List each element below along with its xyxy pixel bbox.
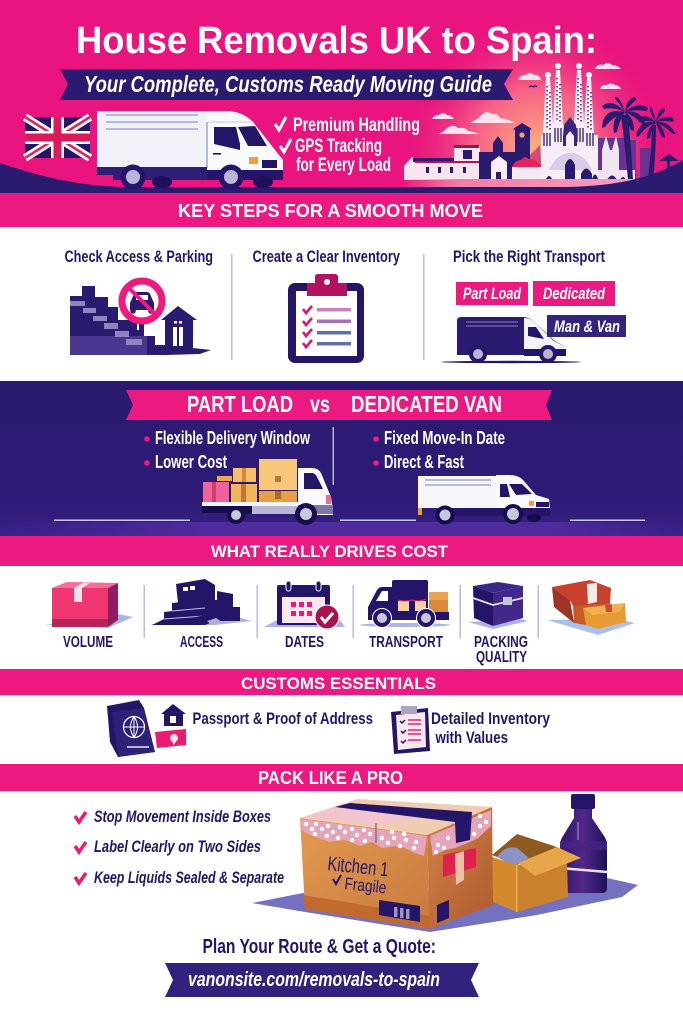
dedicated van benefits xyxy=(373,428,505,472)
clouds xyxy=(432,63,621,134)
header checks: GPS Tracking xyxy=(295,136,382,157)
panel: packing tips: Keep Liquids Sealed & Separate xyxy=(94,868,284,887)
heading: customs essentials xyxy=(0,669,683,695)
step heading: transport: Pick the Right Transport xyxy=(453,247,605,266)
panel: part load vs dedicated van xyxy=(0,381,683,536)
customs item: inventory text xyxy=(431,709,550,747)
heading: what really drives cost: WHAT REALLY DRIVES COST xyxy=(211,542,449,561)
Sagrada Familia xyxy=(541,63,598,179)
part load benefits: Lower Cost xyxy=(155,452,227,472)
illustration: packed boxes and bottle xyxy=(252,794,638,932)
comparison ribbon: DEDICATED VAN xyxy=(351,391,502,417)
url ribbon xyxy=(165,963,479,997)
step heading: inventory: Create a Clear Inventory xyxy=(252,247,400,266)
panel: customs essentials xyxy=(107,700,550,757)
heading: customs essentials: CUSTOMS ESSENTIALS xyxy=(241,674,436,693)
flatbed truck with boxes xyxy=(202,459,333,525)
driver: dates: DATES xyxy=(285,634,324,651)
url ribbon: vanonsite.com/removals-to-spain xyxy=(188,969,440,991)
driver: access xyxy=(150,579,252,651)
left white building xyxy=(404,145,480,180)
icon: detailed inventory clipboard xyxy=(391,706,430,754)
heading: what really drives cost xyxy=(0,536,683,566)
call to action xyxy=(165,936,479,997)
comparison ribbon xyxy=(126,390,552,420)
tag: part load: Part Load xyxy=(463,284,521,303)
small gothic annex xyxy=(598,136,635,180)
call to action: Plan Your Route & Get a Quote: xyxy=(202,936,436,958)
heading: pack like a pro: PACK LIKE A PRO xyxy=(258,768,403,788)
comparison ribbon: PART LOAD xyxy=(187,391,293,417)
panel: packing tips: Stop Movement Inside Boxes xyxy=(94,807,271,826)
customs item: passport text: Passport & Proof of Address xyxy=(192,709,373,728)
tag: dedicated xyxy=(533,281,615,306)
panel: key steps xyxy=(0,227,683,380)
white dedicated van xyxy=(418,475,550,524)
driver: dates xyxy=(264,581,345,651)
kiosk umbrella xyxy=(659,154,679,176)
panel: packing tips: Label Clearly on Two Sides xyxy=(94,837,261,856)
tag: part load xyxy=(456,282,528,305)
carton seam xyxy=(375,823,377,843)
heading: key steps band xyxy=(0,193,683,227)
part load benefits xyxy=(144,428,311,472)
fragile tape xyxy=(443,848,476,885)
icon: clipboard checklist xyxy=(288,274,364,363)
part load benefits: Flexible Delivery Window xyxy=(155,428,311,448)
driver: packing quality xyxy=(468,582,528,666)
label xyxy=(379,900,449,923)
driver: transport xyxy=(360,580,450,651)
driver: transport: TRANSPORT xyxy=(369,634,443,651)
header checks: Premium Handling xyxy=(293,115,420,136)
road and swoosh xyxy=(0,160,683,193)
icon: passport and address xyxy=(107,700,186,757)
customs item: inventory text: with Values xyxy=(435,728,508,747)
delivery truck xyxy=(97,111,283,190)
driver: packing quality: PACKING xyxy=(474,634,528,651)
header checks: for Every Load xyxy=(296,155,391,176)
open carton xyxy=(492,834,581,912)
driver: volume: VOLUME xyxy=(63,634,113,651)
step heading: access: Check Access & Parking xyxy=(64,247,213,266)
panel: packing tips xyxy=(75,807,284,887)
box handwriting xyxy=(326,853,389,897)
palm trees xyxy=(602,97,676,180)
dark church xyxy=(479,123,532,180)
subtitle ribbon: Your Complete, Customs Ready Moving Guide xyxy=(84,71,492,97)
box handwriting: Fragile xyxy=(344,874,387,897)
customs item: inventory text: Detailed Inventory xyxy=(431,709,550,728)
UK flag xyxy=(25,117,90,158)
road xyxy=(54,520,645,521)
main carton xyxy=(300,799,493,929)
box handwriting: Kitchen 1 xyxy=(326,853,389,881)
panel: cost drivers xyxy=(45,579,635,666)
tag: man and van: Man & Van xyxy=(554,317,620,336)
city skyline: Barcelona xyxy=(404,63,679,180)
icon: stairs with no parking sign xyxy=(70,281,211,355)
heading: key steps band: KEY STEPS FOR A SMOOTH MOVE xyxy=(178,201,483,221)
panel: header xyxy=(0,0,683,193)
comparison ribbon: vs xyxy=(310,391,330,417)
driver: packing quality: QUALITY xyxy=(476,649,527,666)
bottle xyxy=(560,794,607,893)
tag: man and van xyxy=(547,315,626,337)
driver: access: ACCESS xyxy=(180,634,223,651)
title: House Removals UK to Spain: xyxy=(76,20,597,62)
heading: pack like a pro xyxy=(0,764,683,791)
packing tape xyxy=(335,803,472,843)
bubble wrap xyxy=(301,819,427,856)
stacked cartons xyxy=(547,580,635,635)
distant buildings xyxy=(596,138,650,180)
tag: dedicated: Dedicated xyxy=(543,284,605,303)
tower stars xyxy=(545,63,592,78)
dedicated van benefits: Direct & Fast xyxy=(384,452,464,472)
small white house xyxy=(491,156,507,180)
driver: volume xyxy=(45,582,133,651)
van xyxy=(441,317,581,363)
birds xyxy=(529,86,537,87)
dedicated van benefits: Fixed Move-In Date xyxy=(384,428,505,448)
sunset glow behind city xyxy=(395,15,683,190)
header checks xyxy=(275,115,420,176)
pink bush and low building xyxy=(512,157,542,167)
subtitle ribbon xyxy=(60,69,513,100)
transport options xyxy=(441,281,626,363)
